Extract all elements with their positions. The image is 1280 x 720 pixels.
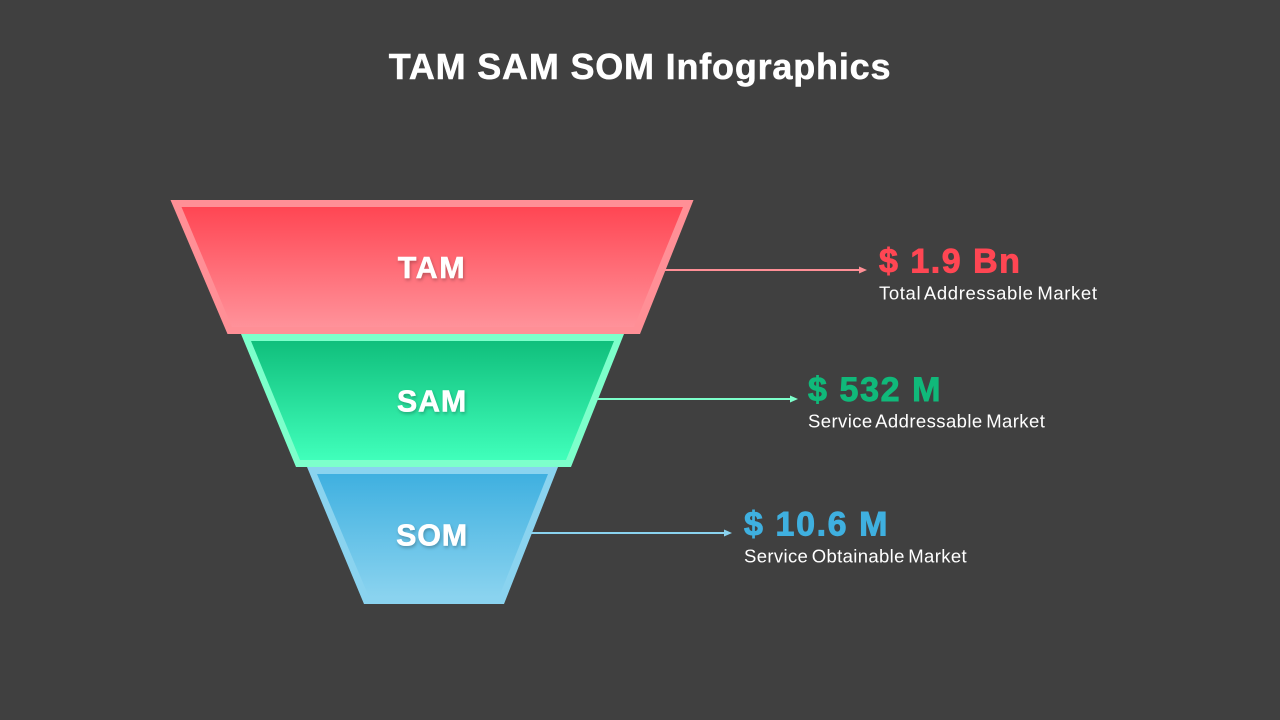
arrow: SOM — [531, 530, 732, 536]
funnel tier: SOM — [307, 467, 558, 604]
funnel tier: SAM: SAM — [397, 384, 467, 418]
funnel tier: SAM — [241, 334, 624, 467]
callout: SOM: Service Obtainable Market — [744, 546, 967, 566]
funnel tier: TAM: TAM — [398, 251, 466, 285]
callout: TAM: $ 1.9 Bn — [879, 242, 1021, 280]
funnel — [170, 200, 694, 604]
callout: TAM: Total Addressable Market — [879, 282, 1098, 304]
arrow: TAM — [665, 266, 867, 274]
funnel tier: TAM — [170, 200, 694, 334]
funnel tier: SOM: SOM — [396, 518, 468, 552]
callout: TAM — [879, 242, 1098, 304]
callout: SAM: $ 532 M — [808, 371, 942, 409]
arrow: SAM — [597, 396, 798, 402]
callout: SAM — [808, 371, 1045, 432]
title: TAM SAM SOM Infographics — [389, 46, 891, 87]
callout: SOM — [744, 506, 967, 566]
callout: SAM: Service Addressable Market — [808, 410, 1045, 432]
callout: SOM: $ 10.6 M — [744, 506, 889, 544]
